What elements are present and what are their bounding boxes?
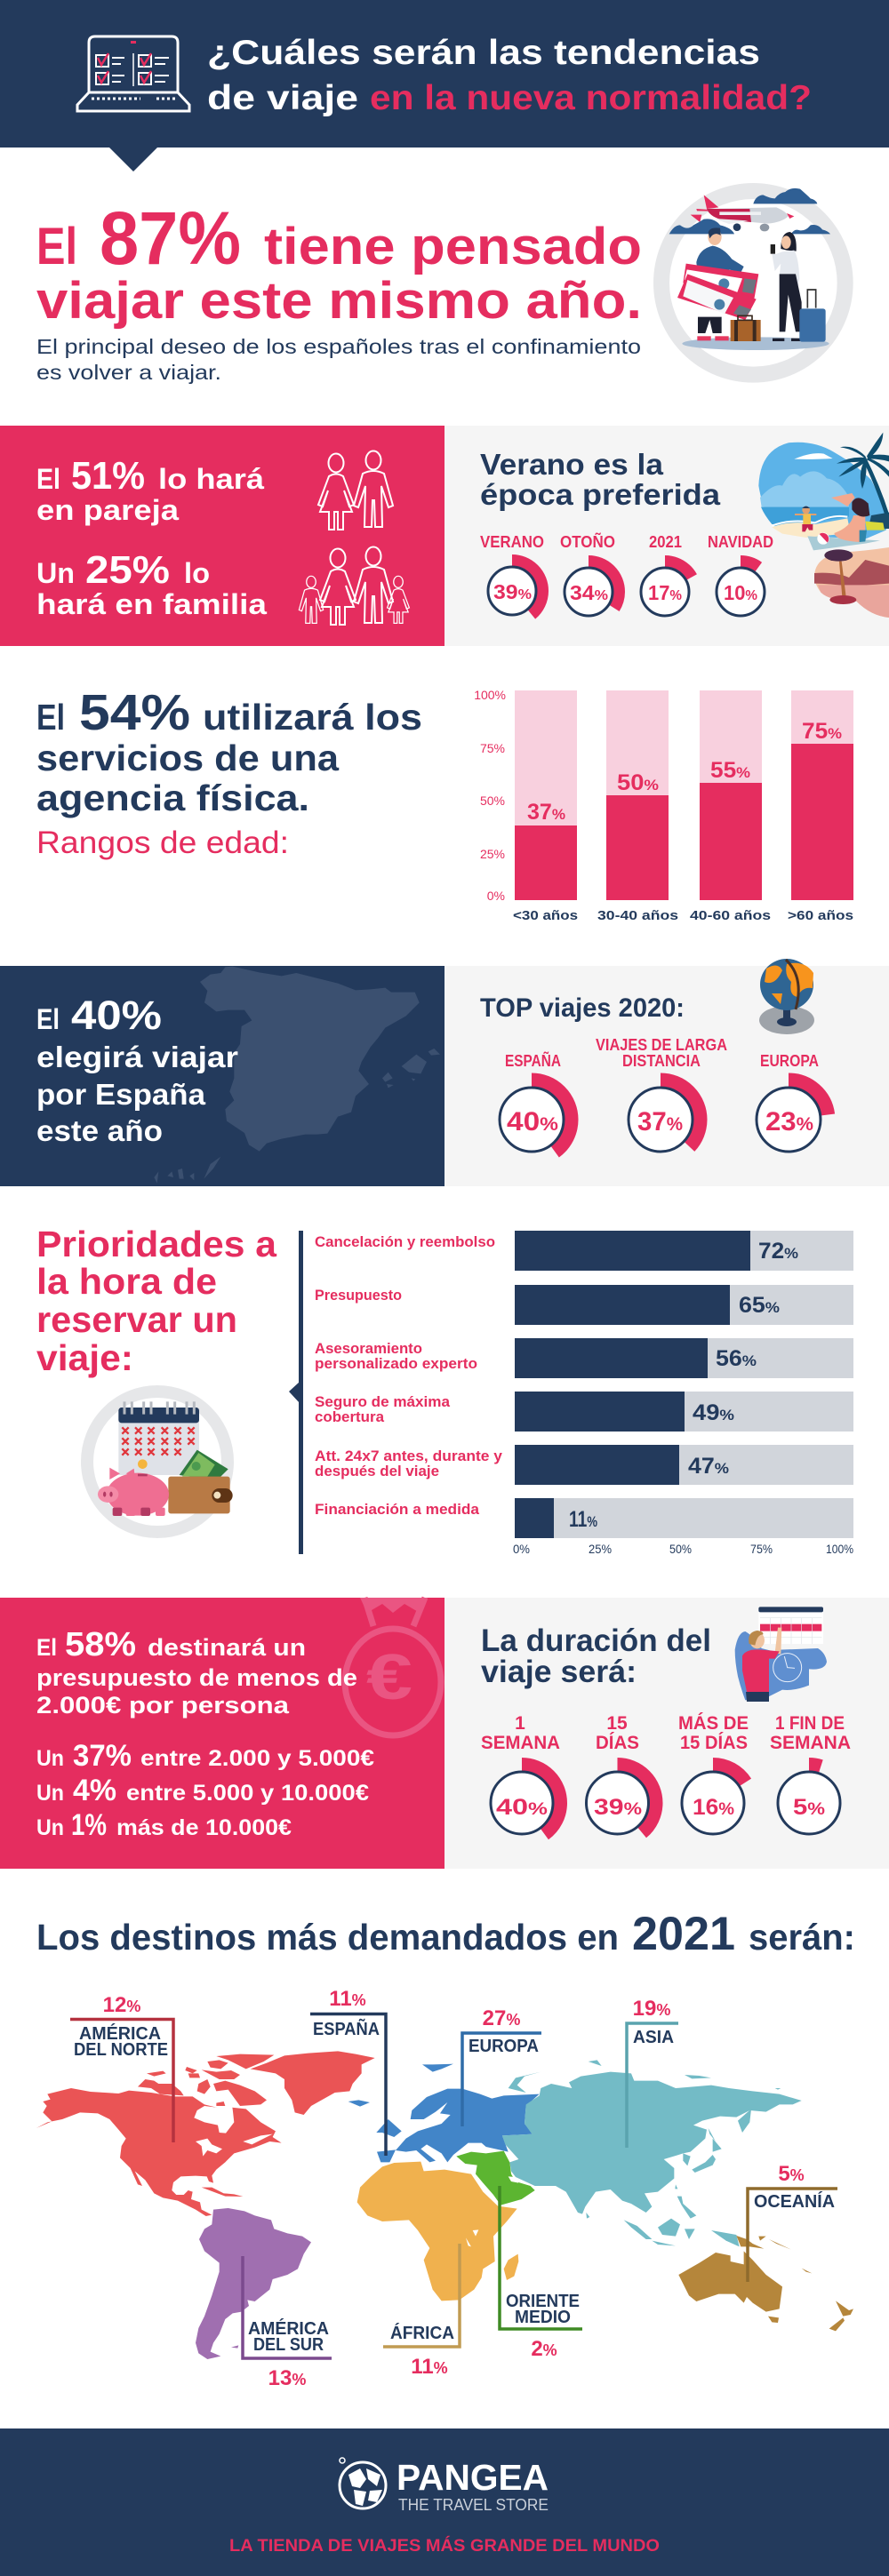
callout: Asia: ASIA <box>633 2028 674 2047</box>
heading: booking priorities: la hora de <box>36 1261 217 1302</box>
callout: América del Norte <box>70 1993 173 2142</box>
bar chart: age ranges: 75% <box>802 719 842 744</box>
panel: physical agency headline: agencia física. <box>36 778 309 818</box>
label: 1 fin de semana <box>770 1713 851 1753</box>
text: 40% Spain: 40% <box>71 993 162 1038</box>
text: other budget shares: 4% <box>73 1774 116 1807</box>
callout: Oriente Medio <box>500 2186 582 2361</box>
text: 58% budget: El <box>36 1634 57 1661</box>
panel: 87% headline: 87% <box>100 196 241 280</box>
text: other budget shares: Un <box>36 1781 64 1806</box>
text: 25% family: lo <box>184 557 210 589</box>
text: other budget shares: más de 10.000€ <box>116 1815 292 1840</box>
icon: family <box>299 547 409 625</box>
icon: beach illustration <box>758 433 889 618</box>
heading: destinations 2021: 2021 <box>632 1908 735 1960</box>
heading: destinations 2021 <box>36 1908 855 1960</box>
panel: trip duration <box>444 1598 889 1869</box>
icon: travellers illustration <box>661 188 845 375</box>
callout: América del Sur: 13% <box>268 2366 306 2390</box>
text: 25% family: Un <box>36 557 75 589</box>
region: Oceania <box>678 2236 853 2331</box>
callout: España <box>310 1987 386 2156</box>
panel: 87% headline: El <box>36 218 77 275</box>
bar chart: priorities: 72% <box>758 1239 798 1264</box>
region: Middle East <box>456 2151 535 2205</box>
donut: navidad 10% <box>710 562 771 622</box>
bar chart: age ranges: 55% <box>710 758 750 783</box>
callout: América del Sur: AMÉRICA <box>248 2318 329 2339</box>
label: España: ESPAÑA <box>505 1051 561 1070</box>
donut: verano 39%: 39% <box>493 580 532 603</box>
label: más de 15 días: 15 DÍAS <box>680 1733 748 1753</box>
text: other budget shares: 37% <box>73 1739 132 1773</box>
label: más de 15 días: MÁS DE <box>678 1713 749 1734</box>
label: 1 semana: 1 <box>515 1713 525 1734</box>
panel: Spain 40% <box>0 966 444 1186</box>
callout: África <box>383 2244 460 2379</box>
subtitle text <box>36 335 641 384</box>
bar chart: priorities: cobertura <box>315 1408 385 1425</box>
divider line with pointer <box>289 1231 303 1554</box>
footer band <box>0 2428 889 2576</box>
callout: Europa: EUROPA <box>469 2037 539 2056</box>
callout: Europa: 27% <box>483 2006 520 2030</box>
text: other budget shares <box>36 1739 374 1842</box>
heading: TOP viajes 2020: <box>480 993 685 1023</box>
text: 51% couple: 51% <box>71 454 145 498</box>
donut: más de 15 días 16%: 16% <box>693 1795 734 1820</box>
heading: época preferida <box>480 478 721 511</box>
heading: viaje será: <box>481 1655 637 1689</box>
panel: physical agency headline: 54% <box>79 684 190 741</box>
label: 1 semana <box>481 1713 560 1753</box>
text: 51% couple <box>36 454 264 526</box>
callout: Oriente Medio: MEDIO <box>515 2308 571 2327</box>
heading: booking priorities: viaje: <box>36 1337 133 1378</box>
text: other budget shares: entre 5.000 y 10.000€ <box>126 1781 369 1806</box>
label: 1 semana: SEMANA <box>481 1733 560 1753</box>
donut: verano 39% <box>482 561 542 621</box>
heading <box>480 448 721 511</box>
bar chart: priorities: 56% <box>716 1346 757 1371</box>
map: Spain silhouette <box>154 967 440 1184</box>
text: 58% budget <box>36 1626 357 1719</box>
donut: 15 días 39%: 39 % <box>594 1795 642 1820</box>
region: South America <box>196 2208 311 2359</box>
icon: money bag watermark <box>345 1598 441 1735</box>
callout: España: 11% <box>329 1987 366 2011</box>
tagline: LA TIENDA DE VIAJES MÁS GRANDE DEL MUNDO <box>229 2536 660 2556</box>
bar chart: priorities: Presupuesto <box>315 1287 402 1304</box>
text: 40% Spain: por España <box>36 1078 206 1111</box>
region: Asia <box>502 2060 802 2246</box>
region: North America <box>36 2051 375 2216</box>
bar chart: age ranges: 30-40 años <box>597 908 678 923</box>
bar chart: age ranges <box>474 688 853 923</box>
bar chart: priorities: personalizado experto <box>315 1355 477 1372</box>
label: otoño: OTOÑO <box>560 532 615 551</box>
bar chart: priorities: 0% <box>513 1542 530 1556</box>
donut: navidad 10%: 10% <box>724 581 757 604</box>
callout: Europa <box>462 2006 541 2126</box>
subheading: age ranges: Rangos de edad: <box>36 825 289 860</box>
panel: 87% headline: viajar este mismo año. <box>36 272 642 330</box>
text: 51% couple: El <box>36 463 60 495</box>
text: other budget shares: Un <box>36 1746 64 1771</box>
bar chart: priorities: 65% <box>739 1293 780 1318</box>
heading <box>481 1623 711 1689</box>
logo wordmark: THE TRAVEL STORE <box>398 2496 549 2514</box>
bar chart: priorities <box>315 1231 853 1556</box>
callout: Oriente Medio: ORIENTE <box>506 2292 580 2311</box>
text: 40% Spain: elegirá viajar <box>36 1041 238 1073</box>
donut: 2021 17% <box>635 562 695 622</box>
icon: globe <box>759 959 814 1034</box>
icon: person with calendar and clock <box>735 1607 827 1702</box>
bar chart: age ranges: 50% <box>617 770 659 795</box>
donut: long distance 37% <box>621 1081 700 1159</box>
panel: physical agency headline: utilizará los <box>203 697 422 738</box>
panel: 87% headline <box>36 196 642 384</box>
text: 51% couple: lo hará <box>158 463 264 495</box>
text: other budget shares: 1% <box>71 1808 107 1842</box>
donut: otoño 34% <box>558 562 619 622</box>
callout: Oceanía: OCEANÍA <box>754 2191 835 2212</box>
bar chart: priorities: Att. 24x7 antes, durante y <box>315 1448 503 1464</box>
label: 2021: 2021 <box>649 533 682 551</box>
label: navidad: NAVIDAD <box>708 533 773 551</box>
heading: booking priorities: reservar un <box>36 1299 237 1340</box>
title <box>207 34 812 117</box>
donut: Europa 23% <box>749 1081 828 1159</box>
icon: Pangea logo globe <box>340 2458 386 2508</box>
text: other budget shares: entre 2.000 y 5.000€ <box>140 1746 374 1771</box>
label: 15 días: 15 <box>606 1713 628 1734</box>
subtitle text: es volver a viajar. <box>36 361 221 384</box>
label: más de 15 días <box>678 1713 749 1753</box>
bar chart: priorities: 47% <box>688 1454 729 1479</box>
callout: Oriente Medio: 2% <box>531 2337 557 2361</box>
label: Europa: EUROPA <box>760 1052 819 1070</box>
bar chart: age ranges: 40-60 años <box>690 908 771 923</box>
text: 25% family: 25% <box>85 548 170 592</box>
bar chart: priorities: Seguro de máxima <box>315 1393 451 1410</box>
title: de viaje <box>207 79 358 117</box>
bar chart: age ranges: 0% <box>487 889 505 903</box>
icon: laptop checklist <box>77 36 189 111</box>
bar chart: priorities: 75% <box>750 1542 773 1556</box>
donut: 1 semana 40% <box>484 1765 560 1841</box>
icon: couple <box>318 451 393 530</box>
bar chart: priorities: 49% <box>693 1400 734 1425</box>
donut: 2021 17%: 17% <box>648 581 682 604</box>
panel: preferred season <box>444 426 889 646</box>
callout: África: ÁFRICA <box>390 2323 454 2343</box>
donut: 15 días 39% <box>580 1765 656 1841</box>
callout: Asia <box>627 1997 678 2148</box>
donut: más de 15 días 16% <box>675 1765 751 1841</box>
callout: América del Norte: DEL NORTE <box>74 2040 168 2060</box>
label: 1 fin de semana: SEMANA <box>770 1733 851 1753</box>
text: 58% budget: 58% <box>65 1626 136 1663</box>
label: long distance: VIAJES DE LARGA <box>596 1036 727 1054</box>
donut: Europa 23%: 23% <box>765 1107 813 1136</box>
label: verano: VERANO <box>480 533 544 551</box>
region: Africa <box>357 2162 518 2301</box>
panel: physical agency headline: El <box>36 697 65 738</box>
callout: América del Sur <box>243 2256 332 2390</box>
icon: money bag watermark: € <box>366 1642 412 1713</box>
heading: La duración del <box>481 1623 711 1658</box>
text: 40% Spain: El <box>36 1003 60 1035</box>
bar chart: priorities: Financiación a medida <box>315 1501 480 1518</box>
title: ¿Cuáles serán las tendencias <box>207 34 760 72</box>
bar chart: priorities: Cancelación y reembolso <box>315 1233 495 1250</box>
panel: 87% headline: tiene pensado <box>264 218 642 275</box>
panel: budget <box>0 1598 444 1869</box>
logo wordmark: PANGEA <box>396 2457 549 2498</box>
label: 15 días <box>596 1713 639 1753</box>
callout: Oceanía <box>748 2162 837 2282</box>
bar chart: age ranges: 75% <box>480 741 505 755</box>
panel: top trips 2020 <box>444 959 889 1186</box>
callout: África: 11% <box>411 2355 448 2379</box>
donut: otoño 34%: 34% <box>570 581 608 604</box>
callout: Asia: 19% <box>633 1997 670 2021</box>
bar chart: age ranges: <30 años <box>513 908 578 923</box>
heading: destinations 2021: serán: <box>749 1917 855 1958</box>
text: 25% family: hará en familia <box>36 588 267 620</box>
text: 40% Spain <box>36 993 238 1147</box>
callout: España: ESPAÑA <box>313 2019 380 2039</box>
donut: España 40%: 40% <box>507 1107 558 1136</box>
donut: long distance 37%: 37% <box>637 1107 683 1136</box>
bar chart: priorities: 100% <box>826 1542 853 1556</box>
bar chart: age ranges: 50% <box>480 794 505 808</box>
text: 58% budget: destinará un <box>148 1634 306 1661</box>
callout: América del Sur: DEL SUR <box>253 2335 324 2355</box>
donut: 1 semana 40%: 40 % <box>496 1795 548 1820</box>
bar chart: priorities: 11% <box>569 1507 597 1532</box>
text: 58% budget: presupuesto de menos de <box>36 1664 357 1691</box>
text: 58% budget: 2.000€ por persona <box>36 1692 290 1719</box>
label: 15 días: DÍAS <box>596 1733 639 1753</box>
title: en la nueva normalidad? <box>370 79 812 117</box>
panel: couples and family <box>0 426 444 646</box>
world map <box>36 2051 853 2359</box>
bar chart: priorities: 25% <box>589 1542 612 1556</box>
bar chart: age ranges: 25% <box>480 847 505 861</box>
donut: fin de semana 5%: 5% <box>793 1795 825 1820</box>
donut: España 40% <box>493 1081 571 1159</box>
bar chart: age ranges: 37% <box>527 800 565 825</box>
bar chart: priorities: después del viaje <box>315 1463 439 1479</box>
panel: physical agency headline <box>36 684 422 860</box>
text: 51% couple: en pareja <box>36 494 179 526</box>
heading: destinations 2021: Los destinos más demandados en <box>36 1917 619 1958</box>
label: 1 fin de semana: 1 FIN DE <box>775 1713 845 1734</box>
text: 25% family <box>36 548 267 620</box>
heading: booking priorities: Prioridades a <box>36 1224 277 1264</box>
bar chart: priorities: Asesoramiento <box>315 1340 422 1357</box>
header band <box>0 0 889 171</box>
icon: calendar, piggy bank and wallet <box>87 1392 233 1532</box>
label: long distance <box>596 1036 727 1070</box>
bar chart: age ranges: >60 años <box>788 908 853 923</box>
region: Europe <box>348 2064 540 2162</box>
callout: América del Norte: 12% <box>103 1993 140 2017</box>
panel: physical agency headline: servicios de una <box>36 738 340 778</box>
bar chart: age ranges: 100% <box>474 688 506 702</box>
heading: booking priorities <box>36 1224 277 1378</box>
subtitle text: El principal deseo de los españoles tras el confinamiento <box>36 335 641 358</box>
label: long distance: DISTANCIA <box>622 1052 701 1070</box>
text: 40% Spain: este año <box>36 1114 163 1147</box>
bar chart: priorities: 50% <box>669 1542 692 1556</box>
heading: Verano es la <box>480 448 664 481</box>
callout: Oceanía: 5% <box>778 2162 805 2186</box>
donut: fin de semana 5% <box>771 1765 847 1841</box>
text: other budget shares: Un <box>36 1815 64 1840</box>
callout: América del Norte: AMÉRICA <box>79 2023 161 2044</box>
